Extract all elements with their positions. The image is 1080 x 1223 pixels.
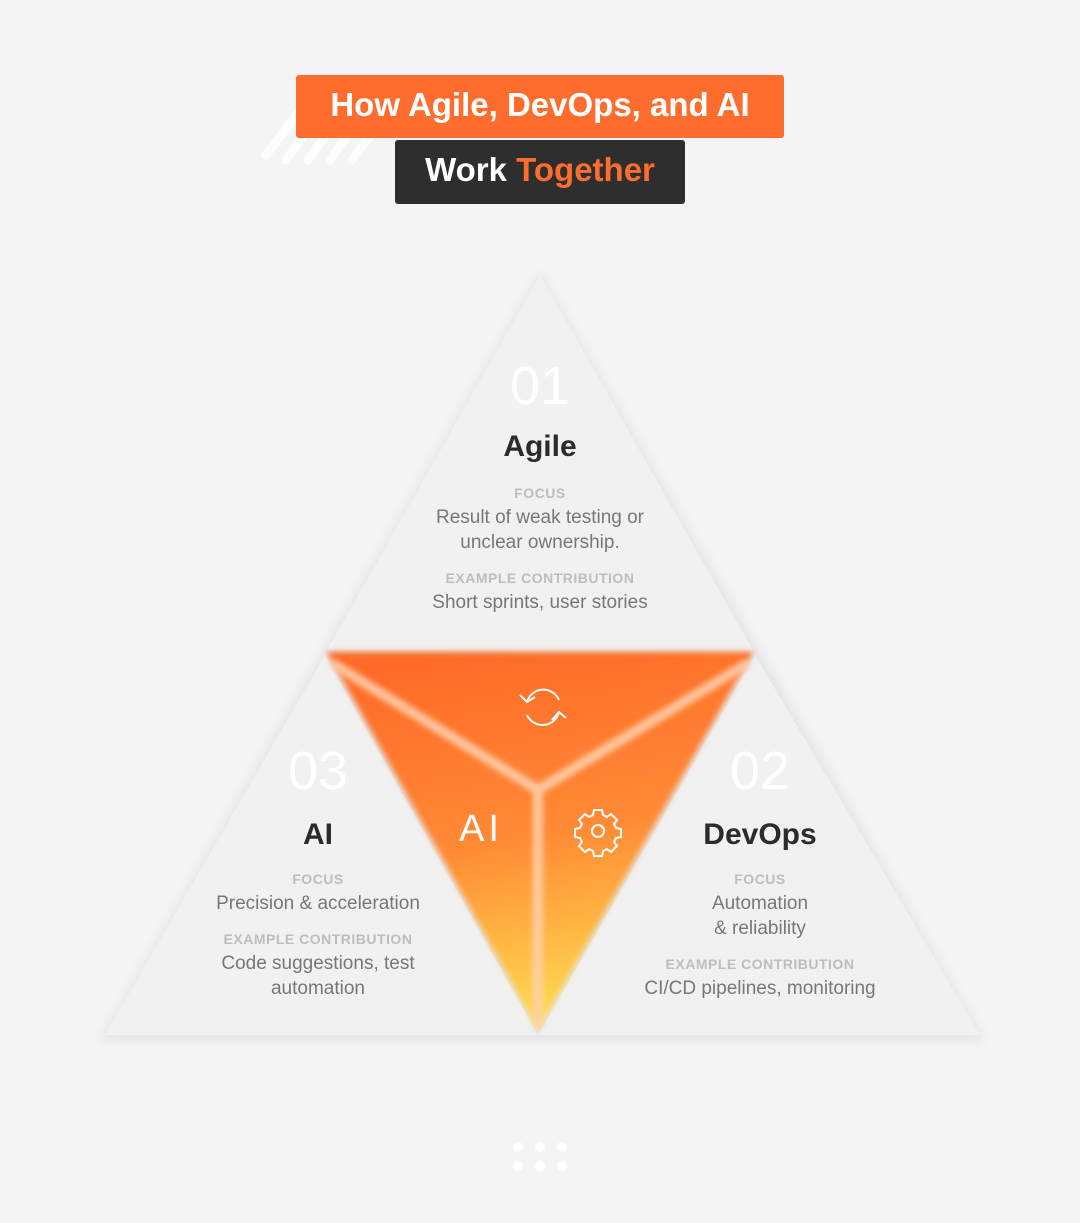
text: AI: EXAMPLE CONTRIBUTION — [224, 931, 412, 947]
icon: gear — [575, 810, 621, 856]
text: agile: FOCUS — [514, 485, 566, 501]
text: agile — [432, 356, 648, 613]
icon: AI text: AI — [459, 808, 503, 850]
text: AI: FOCUS — [292, 871, 344, 887]
text: devops: DevOps — [703, 818, 817, 851]
text: agile: EXAMPLE CONTRIBUTION — [446, 570, 634, 586]
text: devops — [644, 741, 876, 999]
icon: sync arrows — [520, 690, 566, 725]
text: AI: 03 — [288, 741, 348, 801]
text: agile: Agile — [503, 430, 577, 463]
text: devops: 02 — [730, 741, 790, 801]
text: devops: EXAMPLE CONTRIBUTION — [666, 956, 854, 972]
decorative stripes — [262, 109, 374, 164]
title line 2 — [395, 140, 685, 204]
center orange triangle — [327, 652, 753, 1030]
text: devops: CI/CD pipelines, monitoring — [644, 978, 876, 999]
title line 2: Work Together — [425, 151, 655, 188]
text: AI: Code suggestions, test automation — [221, 953, 415, 999]
text: AI: Precision & acceleration — [216, 893, 420, 914]
text: devops: FOCUS — [734, 871, 786, 887]
dots decoration — [513, 1142, 567, 1171]
text: agile: Short sprints, user stories — [432, 592, 648, 613]
text: devops: & reliability — [714, 918, 806, 939]
text: AI — [216, 741, 420, 999]
outer shadow — [100, 272, 985, 1040]
title line 1 — [296, 75, 784, 138]
text: AI: AI — [303, 818, 333, 851]
title — [296, 75, 784, 204]
text: agile: 01 — [510, 356, 570, 416]
text: agile: Result of weak testing or unclear ownership. — [436, 507, 644, 553]
panel: top triangle — [327, 275, 753, 650]
panel: right triangle — [538, 655, 980, 1035]
panel: left triangle — [105, 655, 538, 1035]
title line 1: How Agile, DevOps, and AI — [330, 86, 750, 123]
text: devops: Automation — [712, 893, 808, 914]
